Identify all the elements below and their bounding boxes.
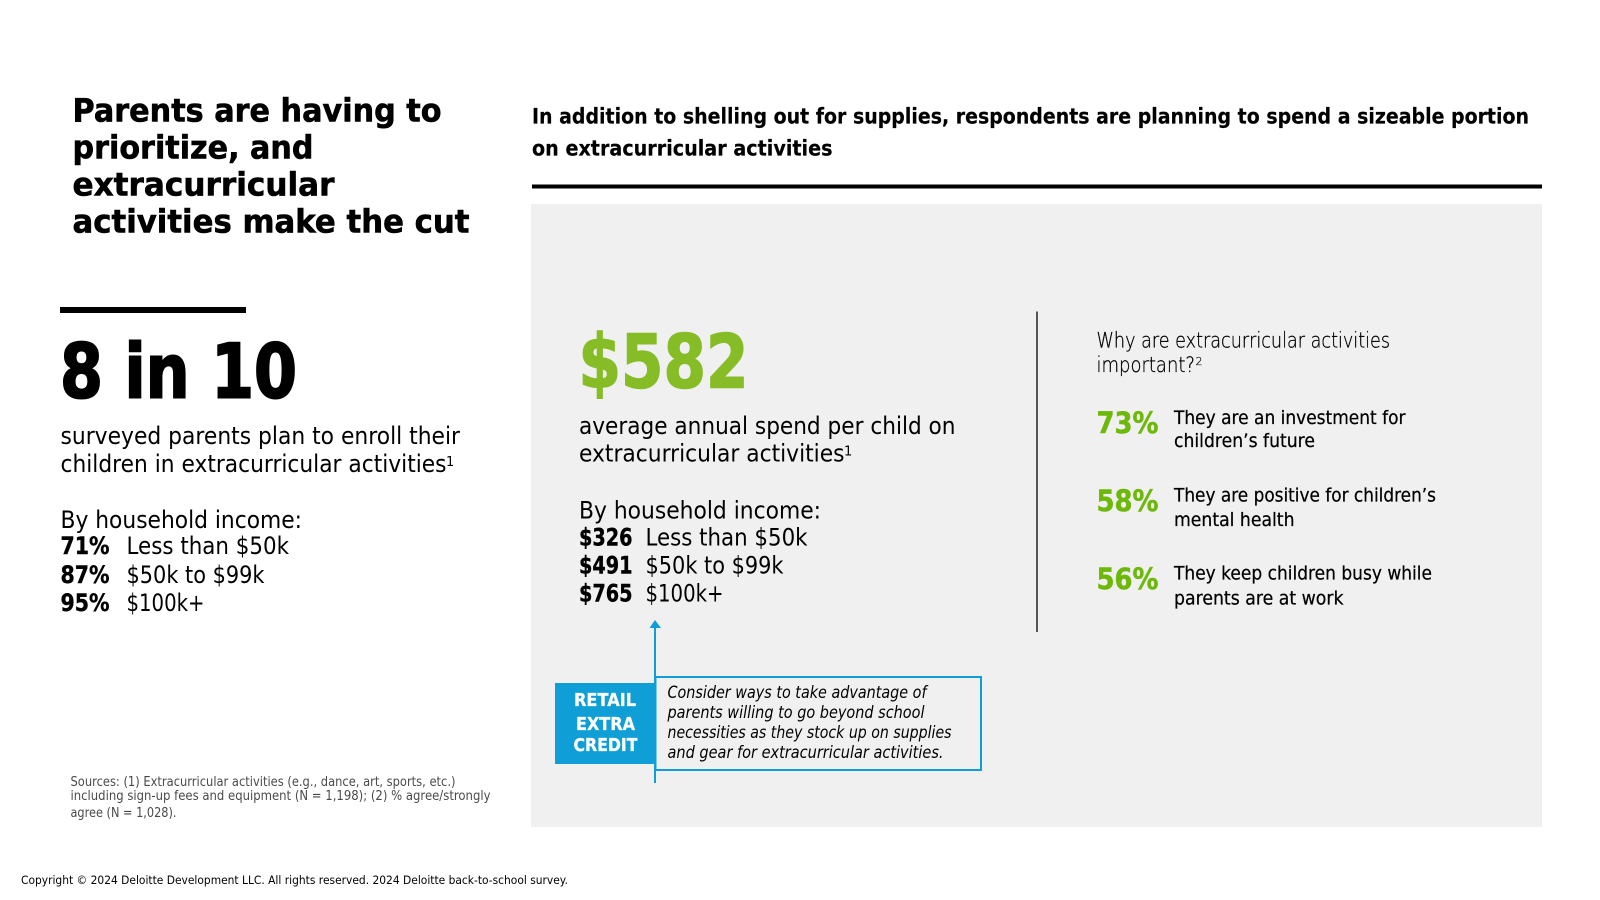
- list: spend by household income: $50k to $99k: [646, 552, 784, 580]
- text block: enrolment description: [60, 422, 460, 478]
- list: spend by household income: $765: [579, 580, 632, 608]
- callout: retail extra credit: CREDIT: [574, 735, 638, 756]
- callout: retail extra credit: parents willing to go beyond school: [667, 703, 925, 723]
- stat: 58% mental health: They are positive for children’s: [1173, 484, 1436, 506]
- right column heading: [532, 104, 1529, 162]
- question heading: [1096, 328, 1390, 377]
- list: spend by household income: By household income:: [579, 496, 821, 524]
- question heading: important?: [1096, 353, 1195, 377]
- stat: 73% investment: [1096, 406, 1406, 452]
- list: enrolment by household income: $100k+: [126, 589, 204, 617]
- callout: retail extra credit: [555, 677, 981, 770]
- big stat: $582: $582: [578, 320, 748, 406]
- text block: spend description: extracurricular activities: [579, 440, 844, 468]
- callout: retail extra credit: necessities as they stock up on supplies: [668, 723, 952, 743]
- text block: enrolment description: surveyed parents plan to enroll their: [60, 422, 460, 450]
- question heading: 2: [1196, 355, 1202, 368]
- right column heading: on extracurricular activities: [532, 136, 832, 162]
- panel: extracurricular spend: [531, 204, 1542, 827]
- callout: retail extra credit: and gear for extracurricular activities.: [668, 743, 944, 763]
- stat: 56% busy: parents are at work: [1174, 588, 1344, 610]
- callout: retail extra credit: EXTRA: [576, 714, 635, 735]
- stat: 58% mental health: 58%: [1096, 484, 1158, 518]
- question heading: Why are extracurricular activities: [1096, 328, 1390, 352]
- callout: retail extra credit: Consider ways to take advantage of: [668, 683, 929, 703]
- title: [72, 92, 470, 240]
- stat: 58% mental health: [1096, 484, 1436, 531]
- text block: enrolment description: 1: [446, 455, 454, 470]
- text block: enrolment description: children in extracurricular activities: [60, 450, 446, 478]
- arrow: [650, 620, 661, 783]
- text block: spend description: 1: [844, 444, 852, 460]
- sources: [70, 775, 491, 821]
- sources: Sources: (1) Extracurricular activities (e.g., dance, art, sports, etc.): [70, 775, 456, 790]
- list: spend by household income: $491: [579, 552, 632, 580]
- stat: 56% busy: They keep children busy while: [1173, 562, 1432, 584]
- big stat: 8 in 10: 8 in 10: [60, 328, 297, 416]
- list: enrolment by household income: 95%: [60, 589, 110, 617]
- list: spend by household income: Less than $50k: [646, 524, 808, 552]
- list: enrolment by household income: Less than $50k: [126, 532, 289, 560]
- stat: 73% investment: They are an investment for: [1173, 407, 1406, 429]
- text block: spend description: average annual spend per child on: [579, 412, 956, 440]
- title: extracurricular: [72, 166, 335, 204]
- list: spend by household income: $326: [579, 524, 632, 552]
- stat: 73% investment: children’s future: [1174, 430, 1315, 452]
- sources: agree (N = 1,028).: [70, 806, 176, 821]
- list: spend by household income: $100k+: [646, 580, 724, 608]
- title: Parents are having to: [72, 92, 442, 130]
- stat: 73% investment: 73%: [1096, 406, 1158, 440]
- list: enrolment by household income: 87%: [60, 561, 110, 589]
- stat: 56% busy: 56%: [1096, 562, 1158, 596]
- copyright: Copyright © 2024 Deloitte Development LLC. All rights reserved. 2024 Deloitte back-to-school survey.: [21, 873, 568, 887]
- callout: retail extra credit: RETAIL: [574, 690, 636, 711]
- text block: spend description: [579, 412, 956, 468]
- sources: including sign-up fees and equipment (N = 1,198); (2) % agree/strongly: [70, 789, 491, 804]
- list: enrolment by household income: 71%: [60, 532, 110, 560]
- list: enrolment by household income: By household income:: [60, 506, 302, 534]
- list: enrolment by household income: $50k to $99k: [126, 561, 265, 589]
- title: prioritize, and: [72, 128, 314, 166]
- title: activities make the cut: [72, 202, 470, 240]
- stat: 56% busy: [1096, 562, 1432, 610]
- list: enrolment by household income: [60, 506, 302, 617]
- list: spend by household income: [579, 496, 821, 608]
- stat: 58% mental health: mental health: [1174, 509, 1294, 531]
